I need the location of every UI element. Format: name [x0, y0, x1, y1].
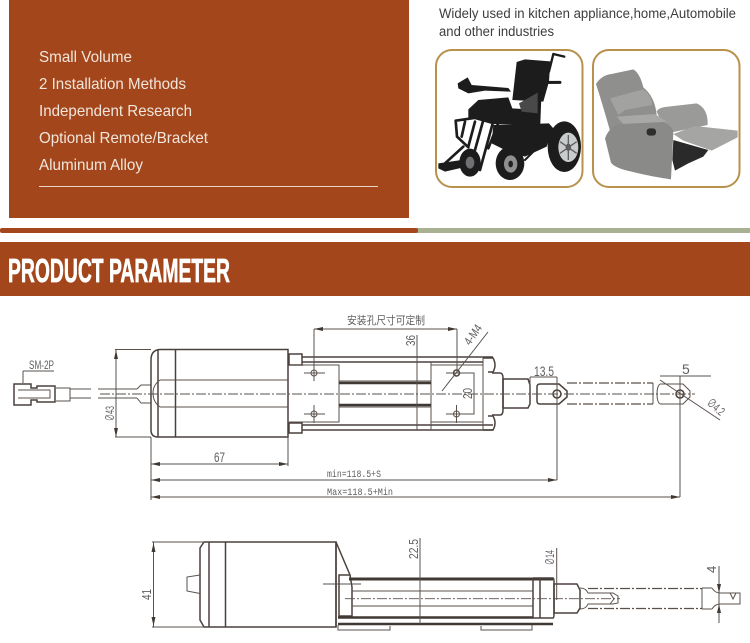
text: applications: Widely used in kitchen appliance,home,Automobile [439, 6, 736, 21]
motor side [139, 542, 336, 627]
dimension lines: 4-M4 [461, 321, 485, 348]
diagram: top view [14, 312, 728, 500]
dimension lines: 13.5 [534, 363, 554, 379]
side dimensions [406, 538, 721, 624]
diagram: side view [139, 538, 740, 630]
dimension lines: 67 [214, 449, 225, 465]
connector and cable: SM-2P [29, 358, 54, 372]
dimension lines: 36 [403, 335, 418, 346]
side dimensions: ∅14 [543, 550, 557, 565]
panel: features: Optional Remote/Bracket [39, 130, 209, 147]
panel: features: 2 Installation Methods [39, 76, 186, 93]
divider bar [0, 228, 750, 233]
motor body: ∅43 [103, 406, 117, 421]
dimension lines: 安装孔尺寸可定制 [347, 312, 425, 328]
panel: features: Aluminum Alloy [39, 157, 143, 174]
text: applications: and other industries [439, 24, 554, 39]
rod side [554, 584, 740, 613]
housing side [323, 542, 620, 630]
panel: features: Small Volume [39, 49, 132, 66]
side dimensions: 4 [704, 566, 719, 573]
dimension lines: 20 [460, 388, 475, 399]
connector and cable [14, 358, 151, 405]
photo: wheelchair [436, 50, 582, 187]
panel: features: Independent Research [39, 103, 192, 120]
dimension lines: ∅4.2 [704, 396, 728, 419]
dimension lines: min=118.5+S [327, 469, 381, 481]
text: applications [439, 6, 736, 39]
side dimensions: 22.5 [406, 539, 421, 559]
actuator housing [289, 354, 530, 433]
dimension lines [151, 312, 728, 500]
heading: product parameter: PRODUCT PARAMETER [8, 252, 230, 289]
dimension lines: Max=118.5+Min [327, 487, 393, 499]
dimension lines: 5 [682, 361, 690, 377]
motor body [103, 350, 288, 437]
photo: recliner [593, 50, 740, 187]
panel: features [9, 0, 409, 218]
motor side: 41 [139, 589, 154, 600]
heading: product parameter [0, 242, 750, 296]
rod and clevis ends [100, 383, 695, 404]
